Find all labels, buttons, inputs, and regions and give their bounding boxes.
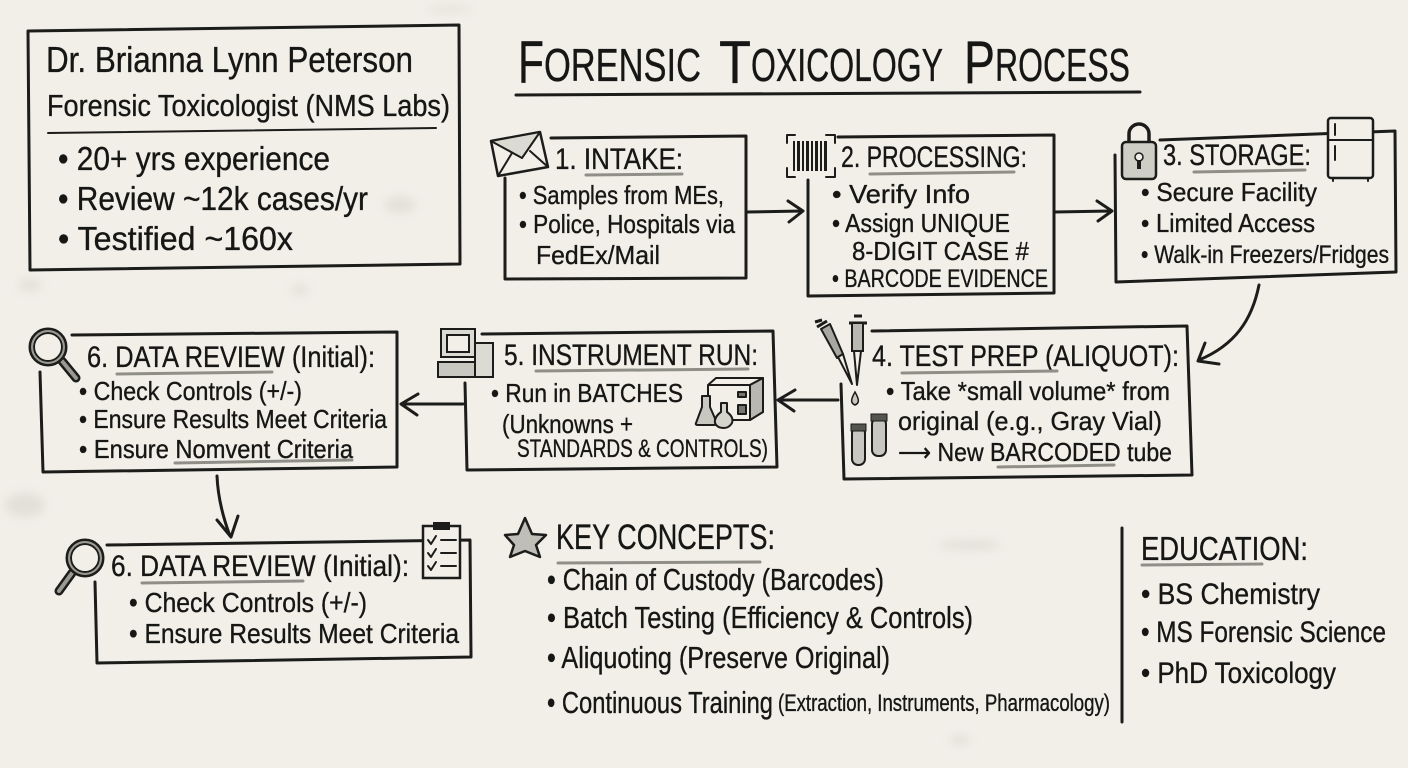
education list: • PhD Toxicology	[1141, 657, 1336, 690]
key concepts list: • Continuous Training	[547, 685, 773, 720]
arrow: intake to processing	[747, 201, 803, 222]
title	[516, 29, 1140, 96]
panel: step 1 intake	[491, 132, 746, 279]
panel: step 6 data review initial upper: • Ensure Nomvent Criteria	[79, 434, 353, 464]
panel: step 6 data review initial upper: • Ensure Results Meet Criteria	[79, 404, 387, 434]
panel: step 6 data review initial upper	[30, 329, 397, 472]
panel: step 3 storage: 3. STORAGE:	[1163, 139, 1311, 172]
icon: pipettes and tubes	[815, 316, 887, 465]
title: P	[964, 29, 995, 96]
panel: profile	[28, 25, 460, 270]
key concepts list: (Extraction, Instruments, Pharmacology)	[778, 690, 1110, 717]
key concepts list	[547, 562, 1110, 720]
panel: step 4 test prep: original (e.g., Gray Vial)	[898, 406, 1162, 436]
panel: step 4 test prep: • Take *small volume* from	[886, 376, 1170, 406]
panel: step 6 data review initial lower: 6. DATA REVIEW (Initial):	[111, 550, 409, 583]
panel: key concepts	[505, 518, 1110, 720]
panel: step 3 storage: • Limited Access	[1141, 208, 1315, 238]
panel: step 4 test prep: 4. TEST PREP (ALIQUOT):	[872, 340, 1179, 373]
panel: step 6 data review initial lower	[59, 522, 471, 663]
panel: step 3 storage	[1115, 118, 1396, 282]
panel: step 6 data review initial upper: • Check Controls (+/-)	[79, 376, 302, 406]
title: F	[518, 29, 544, 96]
education heading: EDUCATION:	[1141, 530, 1308, 567]
icon: clipboard checklist	[423, 522, 460, 578]
panel: step 2 processing: 8-DIGIT CASE #	[852, 236, 1029, 266]
profile bullets: • Review ~12k cases/yr	[58, 180, 368, 217]
panel: step 6 data review initial upper: 6. DATA REVIEW (Initial):	[87, 341, 375, 374]
panel: step 5 instrument run	[438, 329, 777, 470]
panel: education	[1141, 530, 1386, 690]
profile bullets: • 20+ yrs experience	[58, 140, 330, 177]
title: T	[719, 29, 751, 96]
profile bullets: • Testified ~160x	[58, 220, 293, 257]
panel: step 1 intake: 1. INTAKE:	[555, 143, 683, 176]
panel: step 5 instrument run: STANDARDS & CONTROLS)	[517, 435, 768, 463]
icon: star	[505, 518, 546, 557]
panel: step 4 test prep: ⟶ New BARCODED tube	[898, 437, 1172, 467]
key concepts list: • Batch Testing (Efficiency & Controls)	[547, 600, 973, 635]
profile bullets	[58, 140, 368, 257]
panel: step 5 instrument run: • Run in BATCHES	[491, 378, 683, 408]
panel: step 1 intake: • Police, Hospitals via	[519, 209, 735, 239]
panel: step 2 processing	[787, 135, 1054, 296]
arrow: instrument run to data review	[401, 394, 463, 415]
panel: step 2 processing: • Assign UNIQUE	[832, 208, 1010, 238]
panel: step 3 storage: • Secure Facility	[1141, 177, 1317, 207]
panel: step 5 instrument run: (Unknowns +	[502, 409, 633, 439]
key concepts list: • Chain of Custody (Barcodes)	[547, 562, 884, 597]
arrow: processing to storage	[1055, 201, 1112, 221]
education list: • BS Chemistry	[1141, 578, 1320, 611]
icon: envelope	[491, 132, 548, 176]
key concepts list: • Aliquoting (Preserve Original)	[547, 640, 890, 675]
profile name: Dr. Brianna Lynn Peterson	[46, 39, 413, 80]
title: ROCESS	[995, 39, 1130, 91]
panel: step 1 intake: FedEx/Mail	[536, 240, 660, 270]
panel: step 4 test prep	[815, 316, 1192, 479]
panel: step 5 instrument run: 5. INSTRUMENT RUN:	[504, 339, 758, 372]
panel: step 6 data review initial lower: • Check Controls (+/-)	[129, 587, 367, 618]
key concepts heading: KEY CONCEPTS:	[556, 518, 775, 557]
icon: lab instrument and flasks	[696, 378, 763, 428]
icon: barcode	[787, 135, 835, 177]
education list	[1141, 578, 1386, 690]
icon: padlock	[1122, 124, 1156, 179]
profile title: Forensic Toxicologist (NMS Labs)	[47, 88, 450, 123]
title: ORENSIC	[544, 39, 701, 91]
title: OXICOLOGY	[751, 39, 943, 91]
icon: computer	[438, 329, 493, 377]
arrow: down to second data review	[217, 476, 238, 537]
arrow: test prep to instrument run	[778, 390, 838, 411]
panel: step 1 intake: • Samples from MEs,	[519, 180, 724, 210]
panel: step 2 processing: 2. PROCESSING:	[841, 141, 1027, 174]
icon: magnifier	[59, 540, 103, 591]
icon: magnifier	[30, 329, 76, 378]
icon: fridge	[1328, 118, 1373, 181]
arrow: storage to test prep	[1198, 285, 1259, 364]
panel: step 6 data review initial lower: • Ensure Results Meet Criteria	[129, 618, 459, 649]
panel: step 2 processing: • Verify Info	[832, 179, 970, 209]
panel: step 2 processing: • BARCODE EVIDENCE	[832, 265, 1048, 293]
